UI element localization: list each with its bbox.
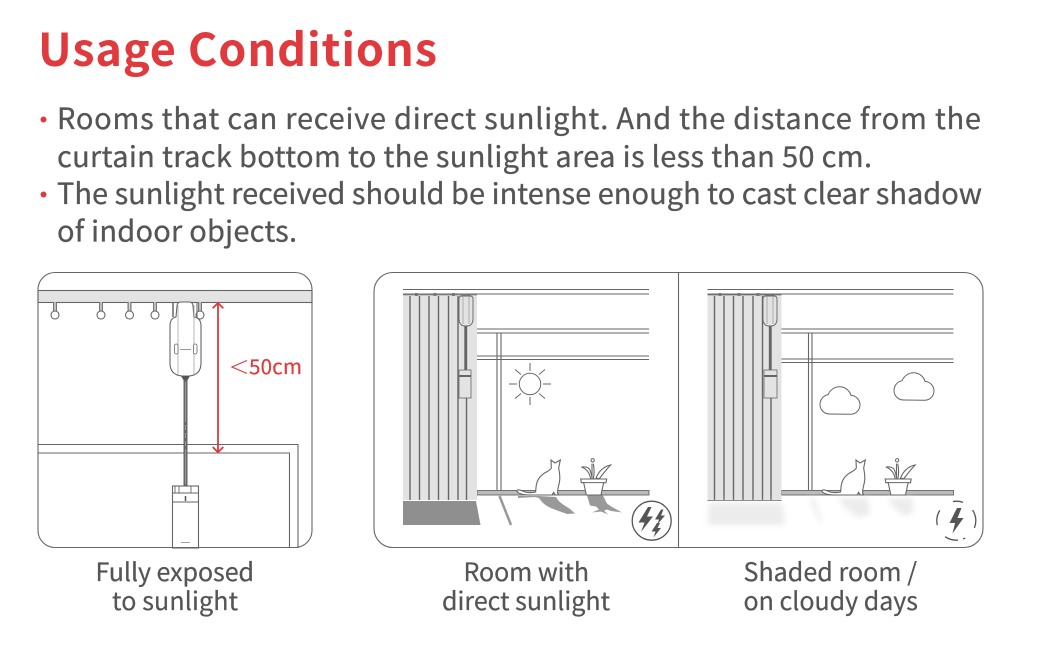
plant [581, 459, 611, 495]
window frame [38, 444, 298, 548]
mini motor [763, 296, 777, 398]
soft shadows [708, 498, 914, 525]
bullet list [40, 96, 982, 250]
cloud 1 [820, 387, 860, 414]
icon: strong sunlight [632, 501, 671, 540]
panel: fully exposed to sunlight [38, 272, 312, 548]
bullet 1: Rooms that can receive direct sunlight. And the distance from the [57, 96, 981, 138]
panel outline [374, 272, 983, 548]
cloud 2 [894, 373, 934, 400]
caption: direct sunlight: direct sunlight [442, 582, 611, 618]
sill [477, 490, 649, 495]
window frame [403, 290, 649, 490]
bullet 2: of indoor objects. [57, 208, 297, 250]
rail [38, 290, 312, 302]
scene: direct sunlight [403, 290, 671, 540]
plant shadow [587, 496, 622, 514]
caption: fully exposed: to sunlight [112, 582, 239, 618]
floor shadow of curtain [403, 501, 480, 525]
bullet 2: The sunlight received should be intense enough to cast clear shadow [57, 171, 982, 213]
divider [678, 272, 680, 548]
panel outline [38, 272, 312, 548]
caption: direct sunlight [442, 553, 611, 618]
caption: fully exposed [96, 553, 254, 618]
cord [184, 380, 188, 487]
plant [885, 459, 915, 495]
motor device [170, 302, 201, 381]
height arrow [213, 303, 223, 452]
caption: fully exposed: Fully exposed [96, 553, 254, 589]
panel: comparison [374, 272, 983, 548]
window shadow [500, 496, 511, 525]
cat [517, 460, 560, 495]
cat shadow [518, 496, 575, 514]
bullet 1: curtain track bottom to the sunlight area is less than 50 cm. [57, 134, 872, 176]
caption: shaded room [744, 553, 918, 618]
curtain [708, 293, 782, 500]
curtain hooks [51, 302, 204, 319]
window frame [708, 290, 954, 490]
caption: shaded room: Shaded room / [744, 553, 917, 589]
scene: shaded room [708, 290, 976, 540]
icon: weak sunlight [937, 501, 976, 540]
label: less than 50cm: 50cm [249, 350, 302, 380]
caption: direct sunlight: Room with [464, 553, 589, 589]
title: Usage Conditions [38, 14, 437, 79]
bullet 2 [40, 171, 982, 250]
mini motor [459, 296, 473, 398]
caption: shaded room: on cloudy days [744, 582, 918, 618]
sensor box [172, 486, 198, 548]
cat [822, 460, 865, 495]
sill [782, 490, 954, 495]
bullet 1 [40, 96, 981, 176]
sun [509, 363, 551, 405]
curtain [403, 293, 477, 500]
